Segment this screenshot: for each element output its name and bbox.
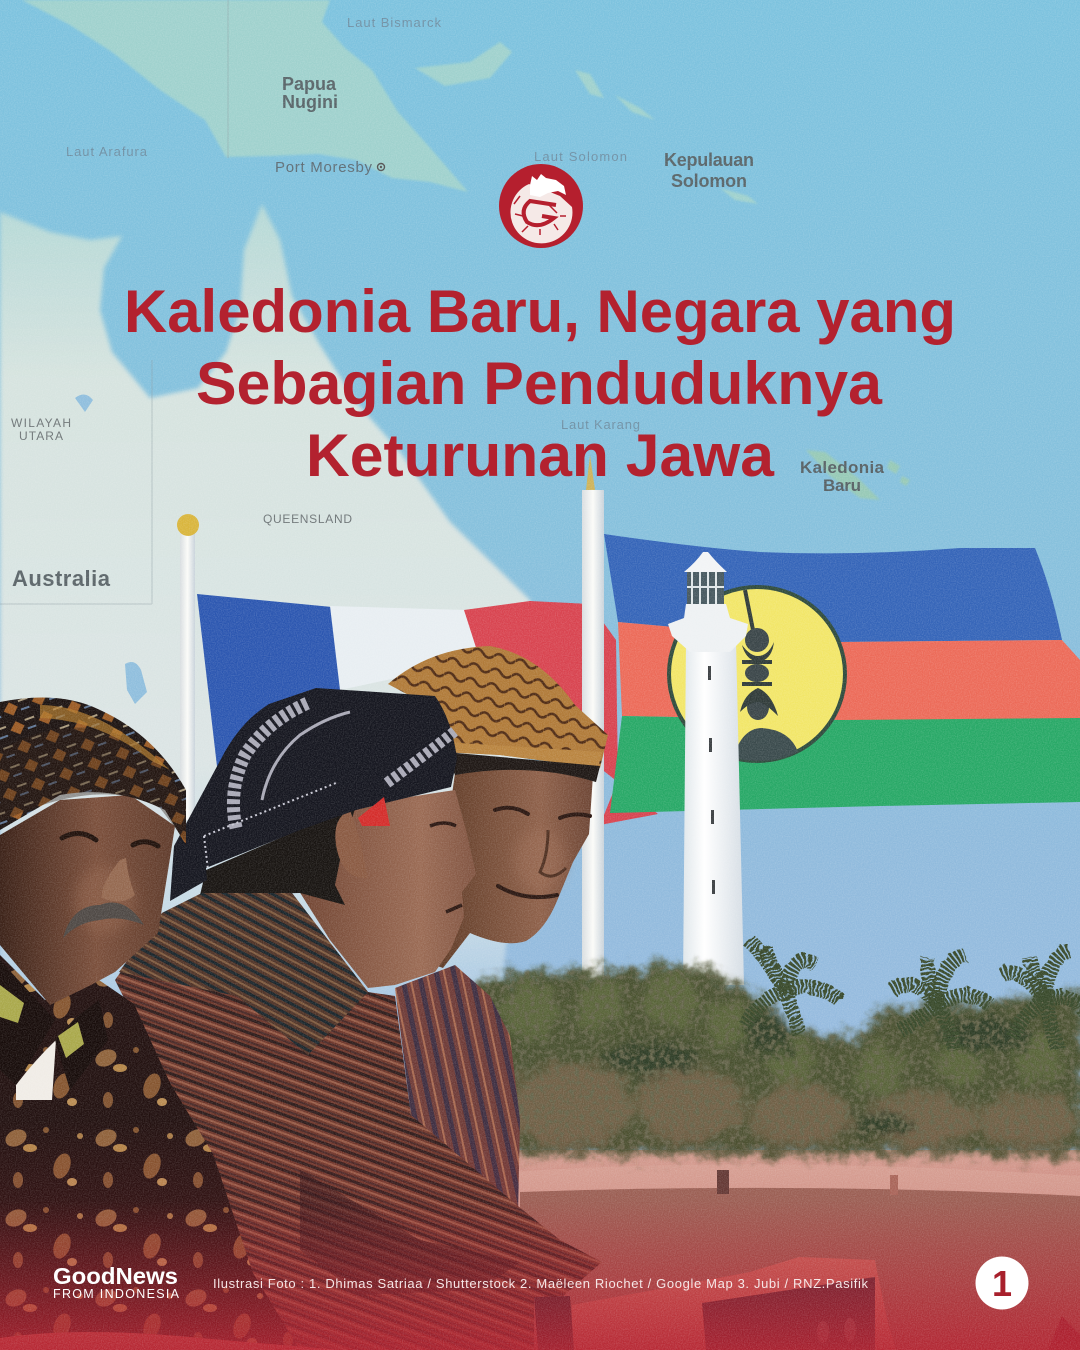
emblem [669,587,845,761]
French flag and pole [177,514,658,825]
red ornament [358,797,390,826]
map labels: Australia [12,566,111,591]
photo credit: Ilustrasi Foto : 1. Dhimas Satriaa / Shutterstock 2. Maëleen Riochet / Google Map 3. Jubi / RNZ.Pasifik [213,1276,869,1291]
map labels: Laut Arafura [66,144,148,159]
map labels: Baru [823,476,861,495]
map labels: Papua [282,74,337,94]
map details [0,0,384,704]
ear [335,810,368,878]
brand logo GoodNews: GoodNews [53,1263,178,1289]
map labels: QUEENSLAND [263,512,352,526]
map labels: Nugini [282,92,338,112]
eyes and mouth [495,808,590,897]
land: New Caledonia islands [806,450,910,500]
collar [119,893,368,1055]
man on the left [0,698,300,1350]
collar pieces [0,960,108,1090]
page number badge: 1 [992,1263,1012,1304]
batik turban [0,698,186,845]
floral shirt [0,955,300,1350]
dark fold under the arm [300,1170,520,1295]
palm fronds [745,940,1080,1050]
map labels [11,15,885,591]
lighthouse [668,552,748,985]
eye and mouth [430,823,462,912]
land: New Britain and islands [415,42,758,204]
striped shirt [115,893,602,1350]
trees [468,940,1080,1155]
title: Sebagian Penduduknya [196,350,883,417]
map labels: WILAYAH [11,416,71,430]
nose [102,858,135,901]
red gradient overlay at the bottom [0,1120,1080,1350]
map labels: Laut Karang [561,417,640,432]
hair [200,805,356,905]
watch strap [534,1296,574,1350]
beach and sea [460,1150,1080,1350]
title: Keturunan Jawa [306,422,775,489]
land: Papua New Guinea [22,0,468,192]
flower yellow [0,985,84,1058]
map labels: Solomon [671,171,747,191]
logo badge [499,164,583,248]
brand logo GoodNews: FROM INDONESIA [53,1287,180,1301]
neck and face [292,790,476,988]
map labels: Kaledonia [800,458,885,477]
map labels: Port Moresby [275,159,372,176]
shirt [395,965,520,1215]
man on the right [388,646,608,1215]
brand logo GoodNews [53,1263,180,1301]
title: Kaledonia Baru, Negara yang [124,278,956,345]
land: Australia [0,204,540,1000]
headcloth batik [204,702,455,870]
batik cap [388,646,608,768]
phone [702,1277,875,1350]
hand holding phone [0,1257,1080,1350]
map labels: Laut Bismarck [347,15,442,30]
map labels: UTARA [19,429,63,443]
eyes [62,833,158,846]
map labels: Laut Solomon [534,149,627,164]
title [124,278,956,489]
man in the middle [115,688,602,1350]
map labels: Kepulauan [664,150,754,170]
flag bands [604,534,1062,642]
neck and face [0,795,175,1005]
moustache [63,902,144,938]
blangkon headcloth [170,688,457,901]
New Caledonia flag and pole [582,455,1080,980]
white undershirt [16,1040,56,1100]
face [420,759,593,968]
shoulder fabric at the bottom [0,1332,340,1350]
page number badge [976,1256,1028,1310]
